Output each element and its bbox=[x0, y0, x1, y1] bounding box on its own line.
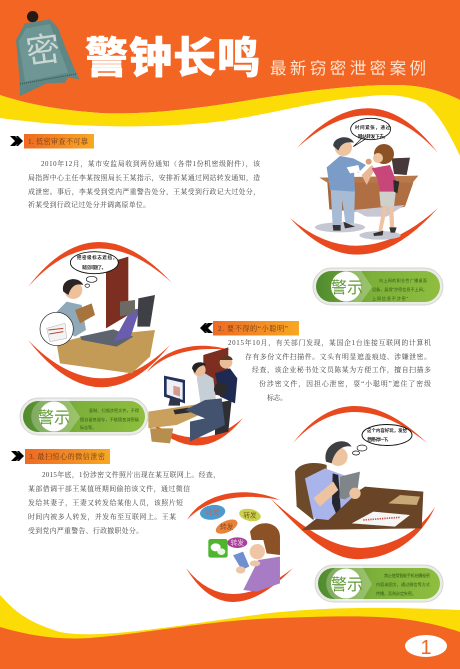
footer band bbox=[0, 595, 460, 669]
warning panel 2: 复制、扫描涉密文件，不得 bbox=[89, 407, 139, 413]
section 3 text: 发给其妻子，王妻又转发给某他人员，该照片短 bbox=[28, 498, 183, 508]
warning panel 1: 警示 bbox=[331, 279, 363, 297]
section 1 text: 2010年12月，某市安监局收到两份通知（各带1份机密级附件），该 bbox=[41, 159, 260, 169]
illustration 3: three men at computer bbox=[147, 346, 243, 446]
speech bubble text: 时间紧张，通过 bbox=[355, 124, 391, 131]
section 2 text bbox=[228, 338, 431, 402]
section 3 text: 时间内被多人转发，并发布至互联网上。王某 bbox=[28, 512, 176, 522]
warning panel 2: 标志等。 bbox=[80, 424, 96, 430]
section 2 text: 存有多份文件扫描件。文头有明显遮盖痕迹、涉嫌泄密。 bbox=[245, 352, 431, 361]
thought bubble text: 把密级标志遮挡， bbox=[77, 254, 117, 261]
warning panel 3 bbox=[315, 565, 443, 602]
illustration 5: woman forwarding on WeChat bbox=[186, 492, 293, 602]
section 3 text: 受到党内严重警告、行政撤职处分。 bbox=[28, 526, 143, 535]
section 2 heading bbox=[200, 321, 299, 336]
section 2 text: 标志。 bbox=[267, 393, 287, 402]
section 2 text: 2015年10月，有关部门发现，某国企1台连接互联网的计算机 bbox=[228, 338, 431, 348]
section 1 heading bbox=[10, 134, 94, 148]
warning panel 3: 内容或图文，通过微信等方式 bbox=[376, 581, 430, 587]
header background band bbox=[0, 0, 460, 156]
icon: bell with 密: 密 bbox=[24, 30, 63, 72]
page number: 1 bbox=[420, 637, 432, 659]
warning panel 1: 上网信息不涉密” bbox=[372, 295, 409, 301]
warning panel 3: 警示 bbox=[331, 576, 363, 594]
icon: thought bubble: 这个内容好玩，发给 bbox=[367, 427, 408, 434]
subtitle: 最新窃密泄密案例 bbox=[270, 59, 426, 78]
icon: bell with 密 bbox=[16, 11, 79, 96]
section 3 text: 2015年底，1份涉密文件照片出现在某互联网上。经查， bbox=[42, 470, 220, 480]
warning panel 1: 向上网的职业性广播桌面 bbox=[379, 277, 427, 283]
illustration 5: woman forwarding on WeChat: 转发 bbox=[243, 510, 257, 519]
thought bubble text bbox=[77, 254, 117, 271]
illustration 4: man photographing with tablet bbox=[270, 406, 435, 559]
warning panel 2: 警示 bbox=[38, 409, 70, 427]
warning panel 3: 禁止使用智能手机拍摄秘密 bbox=[384, 572, 430, 578]
section 2 heading: 2. 要不得的“小聪明” bbox=[218, 324, 288, 333]
illustration 5: woman forwarding on WeChat: 转发 bbox=[231, 538, 244, 547]
page number bbox=[405, 635, 447, 659]
illustration 1: leader and secretary bbox=[290, 108, 438, 255]
illustration 5: woman forwarding on WeChat: 转发 bbox=[220, 522, 234, 531]
section 3 heading bbox=[11, 449, 110, 464]
speech bubble text: 网站转发下去。 bbox=[358, 133, 388, 140]
section 2 text: 经查，该企业秘书处文员陈某为方便工作，擅自扫描多 bbox=[252, 365, 431, 375]
section 2 text: 份涉密文件，因担心泄密，耍“小聪明”遮住了密级 bbox=[259, 379, 431, 389]
section 1 text: 成泄密。事后，李某受到党内严重警告处分，王某受到行政记大过处分， bbox=[28, 187, 260, 197]
speech bubble text bbox=[355, 124, 391, 140]
warning panel 2: 擅自留底留存，不能擅变减密级 bbox=[80, 416, 139, 422]
icon: thought bubble: 老婆分享一下。 bbox=[367, 436, 391, 443]
section 1 heading: 1. 低密审查不可靠 bbox=[28, 137, 88, 146]
warning panel 1: 设备，届保“涉密信息不上网， bbox=[372, 286, 427, 292]
warning panel 2 bbox=[20, 398, 148, 435]
section 3 heading: 3. 最扫惊心的微信泄密 bbox=[29, 452, 106, 461]
section 3 text bbox=[28, 470, 220, 535]
section 1 text: 祈某受到行政记过处分并调离原单位。 bbox=[28, 200, 150, 209]
section 1 text bbox=[28, 159, 260, 209]
section 1 text: 局指挥中心主任李某按照局长王某指示，安排祈某通过网站转发通知，造 bbox=[28, 173, 260, 183]
title: 警钟长鸣 bbox=[85, 24, 260, 86]
warning panel 3: 传播，否则必定失密。 bbox=[376, 590, 416, 596]
illustration 5: woman forwarding on WeChat: 转发 bbox=[206, 508, 220, 517]
thought bubble text: 就没问题了。 bbox=[82, 264, 106, 271]
illustration 2: man scanning file bbox=[28, 242, 172, 387]
warning panel 1 bbox=[313, 268, 443, 305]
section 3 text: 某部借调干部王某值班期间偷拍该文件，通过微信 bbox=[28, 484, 190, 494]
icon: thought bubble bbox=[352, 424, 412, 455]
